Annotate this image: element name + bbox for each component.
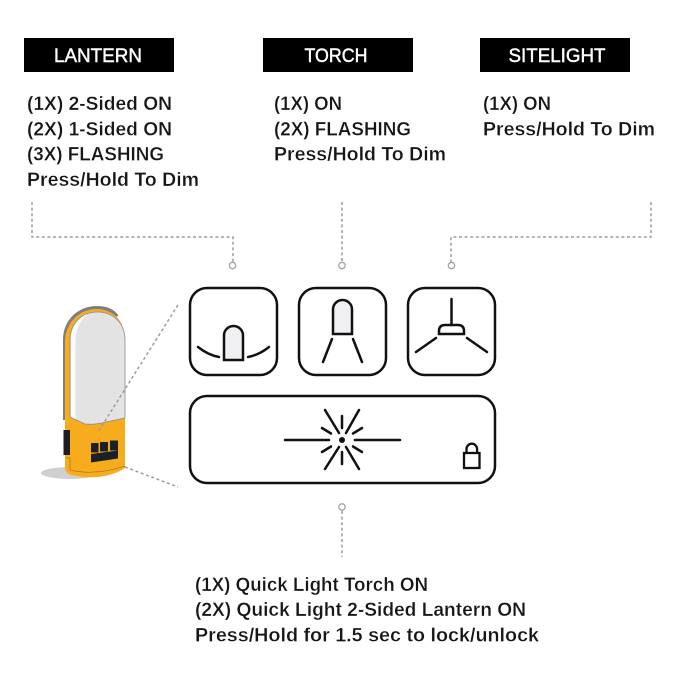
icon: sitelight mode button xyxy=(408,288,495,375)
icon: lock xyxy=(464,444,480,468)
torch instructions: (1X) ON xyxy=(274,94,342,115)
quick light instructions: (2X) Quick Light 2-Sided Lantern ON xyxy=(195,600,526,621)
device side switch xyxy=(64,430,70,455)
illustration: lantern device xyxy=(41,306,125,479)
connector: device to buttons xyxy=(98,305,178,487)
connector: quick light xyxy=(339,504,345,557)
quick light instructions: (1X) Quick Light Torch ON xyxy=(195,575,428,596)
torch heading: TORCH xyxy=(304,45,368,67)
sitelight instructions: (1X) ON xyxy=(483,94,551,115)
device body outline details xyxy=(66,458,70,470)
torch heading xyxy=(263,38,413,72)
quick light instructions xyxy=(195,575,539,646)
torch instructions: Press/Hold To Dim xyxy=(274,144,446,166)
device button panel xyxy=(91,440,118,462)
device grey back edge xyxy=(63,306,118,420)
torch instructions: (2X) FLASHING xyxy=(274,120,411,140)
device white diffuser xyxy=(70,312,125,424)
lantern instructions: (2X) 1-Sided ON xyxy=(27,120,172,140)
torch column: header and instructions xyxy=(263,38,446,166)
quick light instructions: Press/Hold for 1.5 sec to lock/unlock xyxy=(195,626,539,646)
device shadow xyxy=(41,467,99,479)
lantern instructions: (3X) FLASHING xyxy=(27,144,164,166)
sitelight instructions: Press/Hold To Dim xyxy=(483,120,655,140)
device diffuser highlight xyxy=(71,314,87,419)
sitelight heading xyxy=(480,38,630,72)
sitelight column: header and instructions xyxy=(480,38,655,140)
lantern heading: LANTERN xyxy=(54,45,142,67)
lantern column: header and instructions xyxy=(24,38,199,191)
lantern heading xyxy=(24,38,174,72)
icon: lantern mode button xyxy=(190,288,277,375)
sitelight heading: SITELIGHT xyxy=(508,45,606,67)
lantern instructions: Press/Hold To Dim xyxy=(27,170,199,191)
sitelight instructions xyxy=(483,94,655,140)
lantern instructions xyxy=(27,94,199,191)
lantern instructions: (1X) 2-Sided ON xyxy=(27,94,172,115)
icon: torch mode button xyxy=(299,288,386,375)
device yellow body xyxy=(65,309,125,477)
icon: burst xyxy=(285,410,400,469)
icon: quick light button with burst and lock xyxy=(190,396,495,483)
connector: torch xyxy=(339,202,345,269)
connector: lantern xyxy=(32,202,236,269)
connector: sitelight xyxy=(448,202,651,269)
torch instructions xyxy=(274,94,446,166)
